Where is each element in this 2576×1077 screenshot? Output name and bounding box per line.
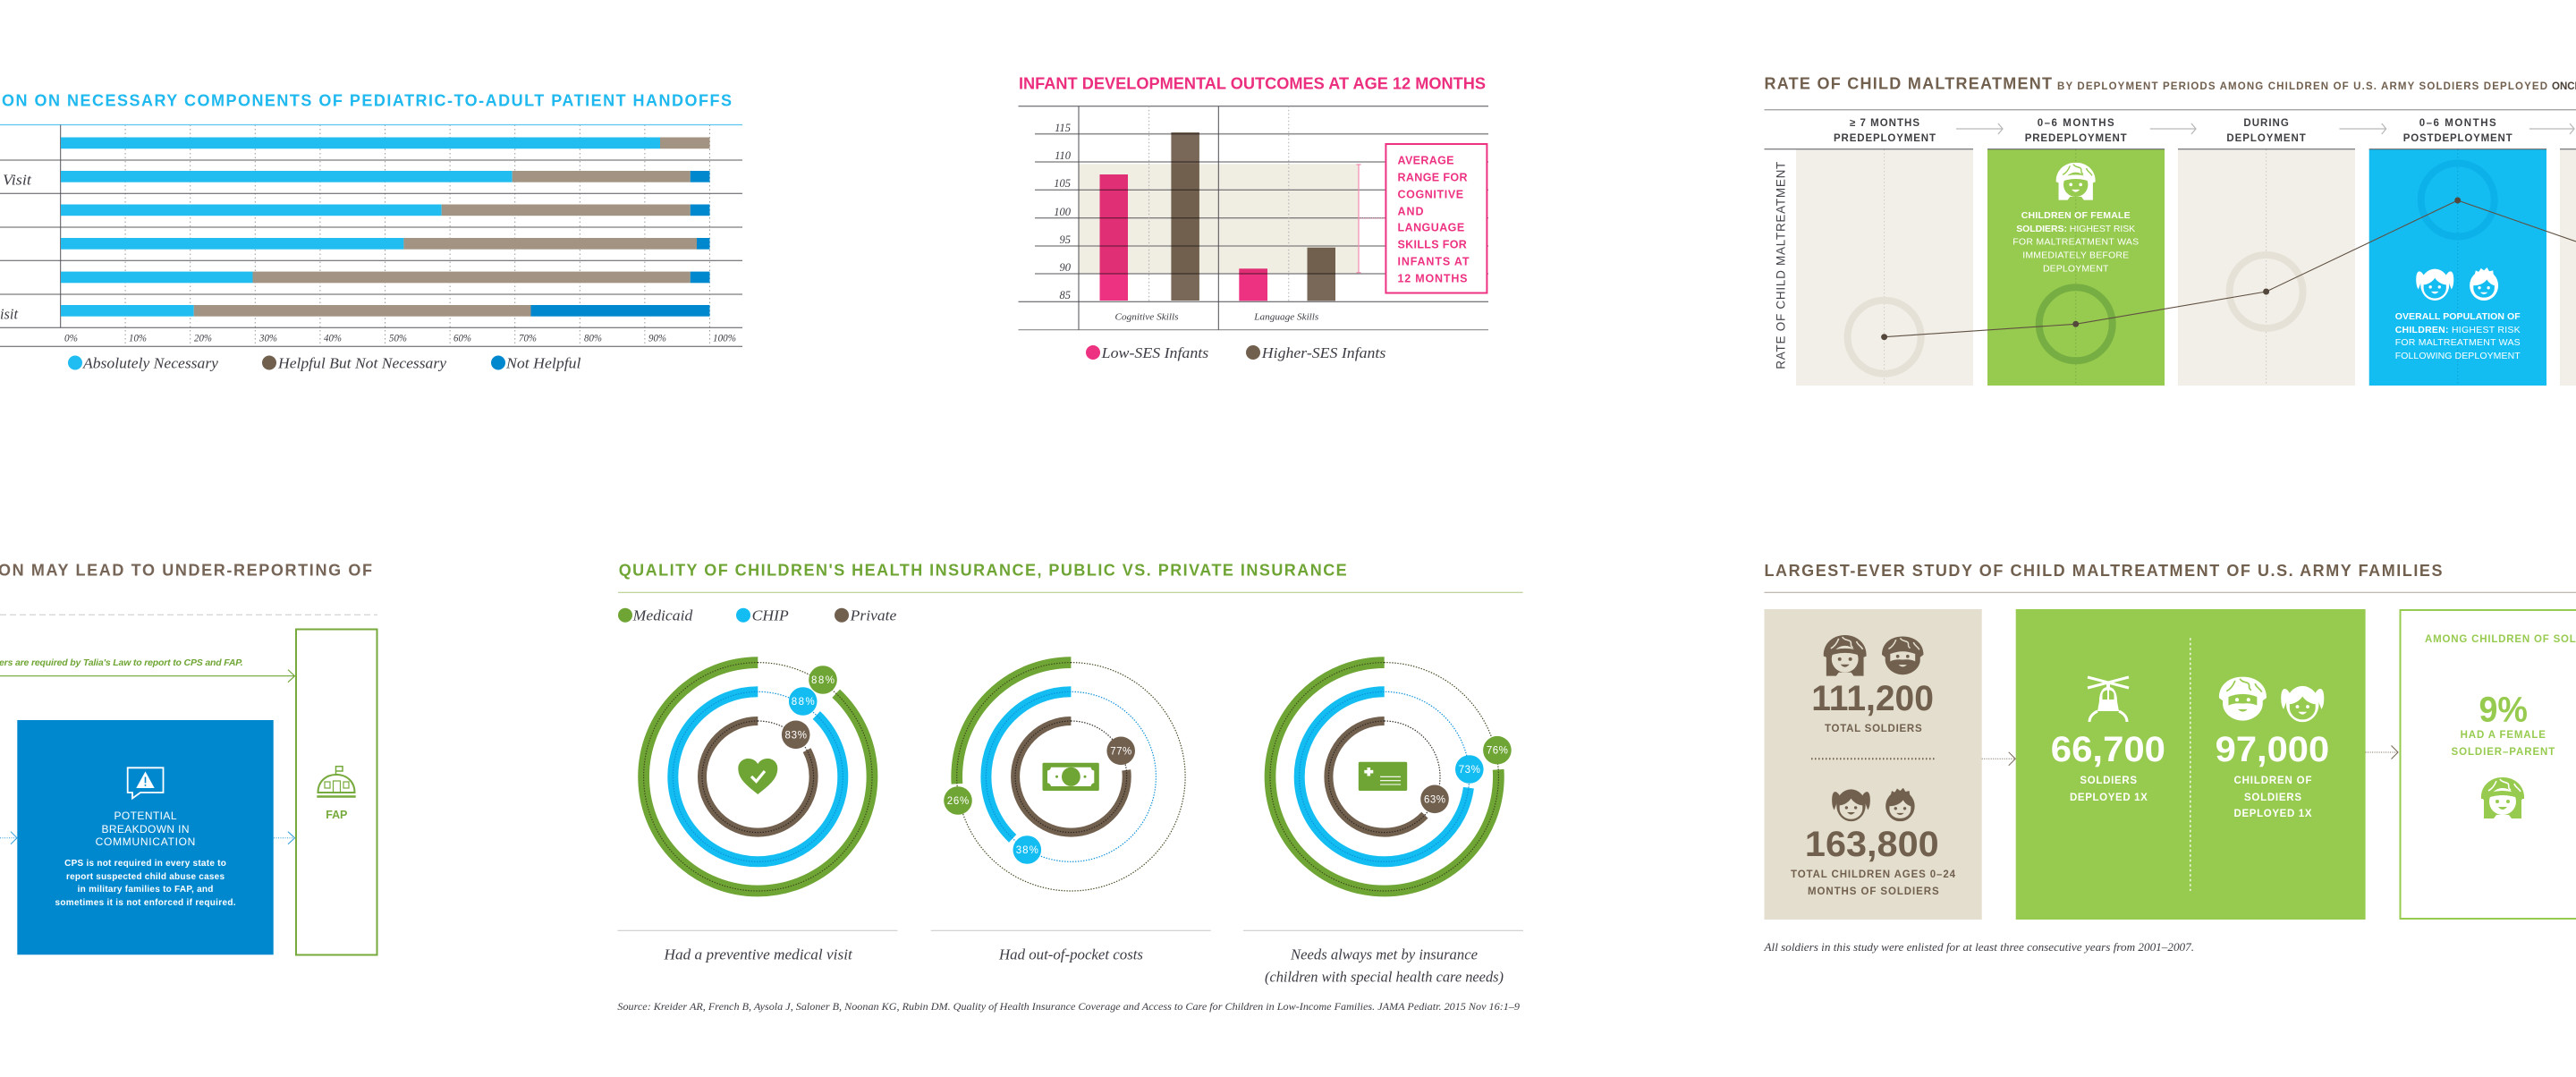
- legend: [1086, 344, 1386, 361]
- axis labels: 40%: [324, 333, 342, 343]
- axis labels: 80%: [584, 333, 602, 343]
- box: deployed once: SOLDIERS: [2080, 776, 2137, 786]
- period headers: PREDEPLOYMENT: [1834, 133, 1936, 144]
- y axis labels: 100: [1054, 206, 1072, 218]
- callout box: INFANTS AT: [1397, 255, 1470, 267]
- icon: children: [1832, 788, 1915, 821]
- bars: [1100, 132, 1335, 301]
- category labels: [1114, 311, 1318, 322]
- axis labels: 10%: [129, 333, 147, 343]
- range band: [1079, 164, 1359, 274]
- box: deployed once: CHILDREN OF: [2234, 776, 2311, 786]
- range bracket: [1356, 165, 1385, 273]
- chart captions: Had a preventive medical visit: [663, 946, 852, 963]
- box: totals: 163,800: [1805, 825, 1939, 864]
- text: female soldiers note: CHILDREN OF FEMALE: [2021, 210, 2131, 221]
- panel: largest-ever study: [1763, 562, 2576, 954]
- callout box: 12 MONTHS: [1397, 272, 1467, 284]
- chart captions: Had out-of-pocket costs: [998, 946, 1143, 963]
- icon: heart check: [738, 759, 777, 794]
- law note: ers are required by Talia's Law to report to CPS and FAP.: [0, 657, 243, 668]
- axis labels: 20%: [194, 333, 212, 343]
- panel: under-reporting flow: [0, 562, 377, 955]
- text: female soldiers note: SOLDIERS: HIGHEST RISK: [2016, 224, 2135, 234]
- box: breakdown in communication: in military families to FAP, and: [78, 885, 213, 895]
- title: [1764, 75, 2576, 93]
- title: INFANT DEVELOPMENTAL OUTCOMES AT AGE 12 MONTHS: [1019, 75, 1486, 93]
- y axis labels: 115: [1055, 122, 1071, 134]
- box: deployed once: 97,000: [2216, 730, 2329, 769]
- text: overall population note: FOR MALTREATMENT WAS: [2395, 337, 2521, 348]
- box: deployed once: 66,700: [2051, 730, 2165, 769]
- box: female soldier share: [2401, 610, 2576, 919]
- box: female soldier share: 9%: [2479, 691, 2528, 730]
- y axis labels: [1054, 122, 1072, 301]
- callout box: COGNITIVE: [1397, 188, 1463, 200]
- row labels: [0, 172, 32, 322]
- box: breakdown in communication: [17, 720, 274, 954]
- radial chart: out-of-pocket costs: 77%: [1110, 746, 1131, 757]
- text: overall population note: [2395, 311, 2521, 361]
- legend: Low-SES Infants: [1101, 344, 1209, 361]
- title: QUALITY OF CHILDREN'S HEALTH INSURANCE, PUBLIC VS. PRIVATE INSURANCE: [619, 562, 1347, 580]
- box: female soldier share: HAD A FEMALE: [2461, 730, 2546, 741]
- icon: female soldier: [2481, 777, 2524, 818]
- radial chart: needs always met: 63%: [1424, 794, 1445, 805]
- text: overall population note: OVERALL POPULATION OF: [2395, 311, 2521, 322]
- text: female soldiers note: FOR MALTREATMENT WAS: [2012, 236, 2139, 247]
- radial chart: out-of-pocket costs: 26%: [947, 796, 969, 807]
- box: deployed once: DEPLOYED 1X: [2234, 809, 2312, 819]
- panel: infant developmental outcomes: [1018, 75, 1488, 361]
- radial chart: preventive medical visit: [644, 663, 872, 891]
- text: overall population note: FOLLOWING DEPLOYMENT: [2395, 351, 2521, 361]
- box: FAP: FAP: [326, 809, 347, 821]
- title: LARGEST-EVER STUDY OF CHILD MALTREATMENT OF U.S. ARMY FAMILIES: [1764, 562, 2442, 580]
- chart captions: (children with special health care needs): [1265, 968, 1504, 986]
- legend: CHIP: [752, 606, 789, 624]
- source note: Source: Kreider AR, French B, Aysola J, Saloner B, Noonan KG, Rubin DM. Quality of Health Insurance Coverage and Access to Care for Children in Low-Income Families. JAMA Pediatr. 2015 Nov 16:1–9: [617, 1000, 1520, 1013]
- legend: Helpful But Not Necessary: [277, 354, 446, 372]
- box: breakdown in communication: CPS is not required in every state to: [64, 859, 226, 869]
- axis labels: [64, 333, 736, 343]
- icon: soldiers: [1824, 635, 1923, 676]
- box: breakdown in communication: BREAKDOWN IN: [102, 823, 190, 835]
- box: totals: MONTHS OF SOLDIERS: [1808, 886, 1939, 897]
- y axis labels: 95: [1059, 233, 1071, 246]
- panel: rate of child maltreatment: [1764, 75, 2576, 386]
- footnote: All soldiers in this study were enlisted for at least three consecutive years from 2001–2007.: [1763, 941, 2194, 954]
- legend: [618, 606, 897, 624]
- axis labels: 0%: [64, 333, 78, 343]
- icon: female soldier: [2056, 163, 2096, 200]
- column panels: [1764, 149, 2576, 386]
- axis labels: 30%: [258, 333, 277, 343]
- stacked bar chart: [0, 125, 742, 346]
- callout box: [1385, 144, 1487, 293]
- radial chart: preventive medical visit: 83%: [784, 730, 807, 741]
- axis labels: 70%: [519, 333, 537, 343]
- y axis labels: 105: [1054, 177, 1071, 190]
- box: deployed once: [2016, 609, 2366, 920]
- category labels: Cognitive Skills: [1114, 311, 1179, 322]
- box: breakdown in communication: COMMUNICATION: [96, 835, 195, 848]
- data rings: [1848, 163, 2495, 374]
- bar: row 5: [61, 272, 710, 283]
- text: overall population note: CHILDREN: HIGHEST RISK: [2395, 325, 2521, 335]
- box: totals: 111,200: [1811, 679, 1934, 718]
- radial chart: preventive medical visit: 88%: [792, 697, 815, 708]
- legend: Medicaid: [632, 606, 693, 624]
- box: deployed once: DEPLOYED 1X: [2070, 793, 2148, 803]
- arrows: through breakdown: [0, 832, 295, 844]
- title: RATE OF CHILD MALTREATMENT: [1764, 75, 2052, 93]
- icon: helicopter: [2088, 677, 2129, 722]
- y axis labels: 110: [1055, 149, 1072, 162]
- legend: Not Helpful: [505, 354, 581, 372]
- chart captions: Needs always met by insurance: [1290, 946, 1478, 963]
- bar: row 2: [61, 171, 710, 182]
- period headers: 0–6 MONTHS: [2038, 118, 2114, 129]
- period headers: PREDEPLOYMENT: [2025, 133, 2127, 144]
- row labels: isit: [0, 306, 19, 322]
- radial chart: needs always met: 73%: [1459, 765, 1480, 776]
- text: female soldiers note: IMMEDIATELY BEFORE: [2022, 250, 2129, 260]
- box: breakdown in communication: POTENTIAL: [114, 810, 177, 822]
- text: female soldiers note: [2012, 210, 2139, 274]
- period headers: POSTDEPLOYMENT: [2403, 133, 2512, 144]
- arrow: to FAP: [0, 670, 295, 683]
- callout box: AVERAGE: [1397, 154, 1454, 166]
- icon: girl and boy: [2416, 267, 2498, 301]
- radial chart: preventive medical visit: 88%: [811, 675, 835, 686]
- grid lines: [1018, 106, 1488, 330]
- bar: row 6: [61, 305, 710, 317]
- panel: quality of children's health insurance: [617, 562, 1523, 1013]
- arrow: deployed to female soldier share: [2366, 746, 2398, 759]
- row labels: Visit: [3, 172, 32, 188]
- icon: cash: [1043, 763, 1099, 791]
- axis labels: 90%: [648, 333, 666, 343]
- box: FAP: [296, 630, 377, 955]
- axis labels: 100%: [713, 333, 736, 343]
- title: ON MAY LEAD TO UNDER-REPORTING OF: [0, 562, 372, 580]
- legend: Private: [850, 606, 897, 624]
- panel: opinion on pediatric-to-adult patient handoffs: [0, 91, 742, 372]
- period headers: ≥ 7 MONTHS: [1850, 118, 1919, 129]
- legend: Higher-SES Infants: [1261, 344, 1386, 361]
- y axis labels: 90: [1059, 261, 1072, 274]
- box: totals: [1764, 609, 1982, 920]
- radial chart: out-of-pocket costs: 38%: [1016, 845, 1038, 856]
- legend: Absolutely Necessary: [82, 354, 218, 372]
- bar: row 4: [61, 238, 710, 250]
- period headers: 0–6 MONTHS: [2419, 118, 2496, 129]
- period headers: DEPLOYMENT: [2226, 133, 2306, 144]
- box: totals: TOTAL CHILDREN AGES 0–24: [1791, 869, 1956, 880]
- box: deployed once: SOLDIERS: [2244, 793, 2301, 803]
- line chart: [1881, 197, 2576, 340]
- icon: warning bubble: [128, 767, 163, 798]
- callout box: RANGE FOR: [1397, 171, 1467, 183]
- title: ON ON NECESSARY COMPONENTS OF PEDIATRIC-TO-ADULT PATIENT HANDOFFS: [2, 91, 732, 109]
- icon: FAP dome building: [317, 767, 356, 796]
- box: breakdown in communication: sometimes it is not enforced if required.: [55, 898, 236, 908]
- icon: insurance card: [1359, 762, 1407, 791]
- callout box: LANGUAGE: [1397, 221, 1464, 233]
- radial chart: out-of-pocket costs: [944, 663, 1185, 891]
- radial chart: needs always met: [1270, 663, 1512, 891]
- callout box: SKILLS FOR: [1397, 238, 1467, 250]
- box: breakdown in communication: report suspected child abuse cases: [66, 872, 225, 882]
- axis labels: 50%: [389, 333, 407, 343]
- period headers: DURING: [2243, 118, 2289, 129]
- callout box: AND: [1397, 205, 1424, 217]
- bar: row 3: [61, 204, 710, 216]
- period headers: [1834, 118, 2512, 144]
- box: female soldier share: SOLDIER–PARENT: [2452, 747, 2555, 758]
- axis labels: 60%: [453, 333, 471, 343]
- y axis label: RATE OF CHILD MALTREATMENT: [1775, 162, 1787, 369]
- box: totals: TOTAL SOLDIERS: [1825, 724, 1922, 734]
- chart captions: [663, 946, 1504, 986]
- legend: [68, 354, 581, 372]
- radial chart: needs always met: 76%: [1487, 746, 1508, 757]
- arrows between periods: [1956, 123, 2574, 134]
- y axis labels: 85: [1059, 289, 1071, 301]
- bar: row 1: [61, 138, 710, 148]
- category labels: Language Skills: [1253, 311, 1318, 322]
- title: BY DEPLOYMENT PERIODS AMONG CHILDREN OF U.S. ARMY SOLDIERS DEPLOYED: [2057, 81, 2547, 92]
- icon: soldier and child: [2219, 677, 2324, 722]
- arrow: totals to deployed: [1982, 752, 2015, 766]
- text: female soldiers note: DEPLOYMENT: [2043, 263, 2109, 274]
